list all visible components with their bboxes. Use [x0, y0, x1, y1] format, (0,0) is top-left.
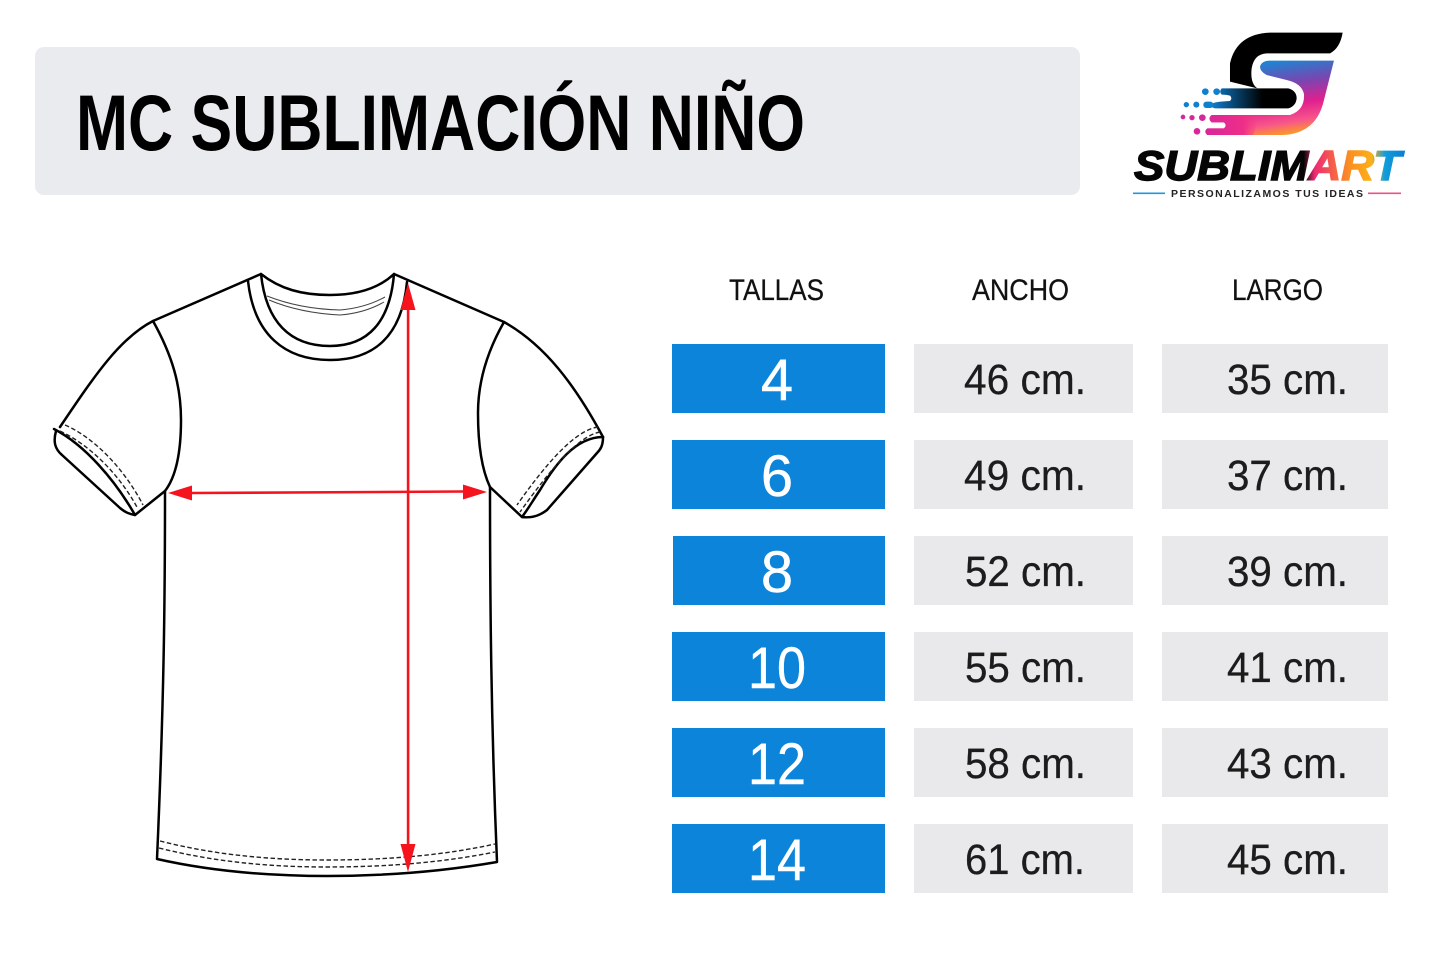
row: talla 12 — [672, 728, 1388, 797]
t-shirt diagram — [54, 274, 603, 876]
row: talla 6: 49 cm. — [964, 452, 1086, 500]
row: talla 6 — [672, 440, 1388, 509]
row: talla 6: 6 — [761, 444, 793, 509]
row: talla 4: 4 — [761, 348, 793, 413]
row: talla 8: 39 cm. — [1227, 548, 1348, 596]
row: talla 4: 46 cm. — [964, 356, 1086, 404]
icon: stylised S — [1181, 33, 1343, 135]
row: talla 12: 58 cm. — [965, 740, 1086, 788]
arrow: length — [400, 283, 416, 872]
stitching — [60, 425, 143, 509]
table headers: TALLAS — [729, 274, 824, 307]
logo wordmark: SUBLIMART — [1134, 142, 1405, 189]
row: talla 8 — [673, 536, 1388, 605]
title: MC SUBLIMACIÓN NIÑO — [76, 78, 805, 167]
neck ribbing — [248, 274, 407, 360]
row: talla 14: 61 cm. — [965, 836, 1085, 884]
row: talla 14 — [672, 824, 1388, 893]
row: talla 8: 52 cm. — [965, 548, 1086, 596]
arrow: width — [168, 484, 487, 500]
row: talla 10: 41 cm. — [1227, 644, 1348, 692]
row: talla 14: 45 cm. — [1227, 836, 1348, 884]
shirt outline — [54, 274, 603, 876]
row: talla 10: 10 — [748, 636, 806, 701]
title banner — [35, 47, 1080, 195]
row: talla 4 — [672, 344, 1388, 413]
row: talla 12: 43 cm. — [1227, 740, 1348, 788]
row: talla 10 — [672, 632, 1388, 701]
table headers — [729, 274, 1323, 307]
row: talla 8: 8 — [761, 540, 793, 605]
row: talla 12: 12 — [748, 732, 806, 797]
table headers: ANCHO — [972, 274, 1069, 307]
row: talla 10: 55 cm. — [965, 644, 1086, 692]
row: talla 6: 37 cm. — [1227, 452, 1348, 500]
logo: Sublimart — [1133, 33, 1405, 200]
table headers: LARGO — [1232, 274, 1323, 307]
size table — [672, 274, 1388, 893]
logo tagline: PERSONALIZAMOS TUS IDEAS — [1171, 188, 1363, 200]
row: talla 4: 35 cm. — [1227, 356, 1348, 404]
row: talla 14: 14 — [748, 828, 806, 893]
